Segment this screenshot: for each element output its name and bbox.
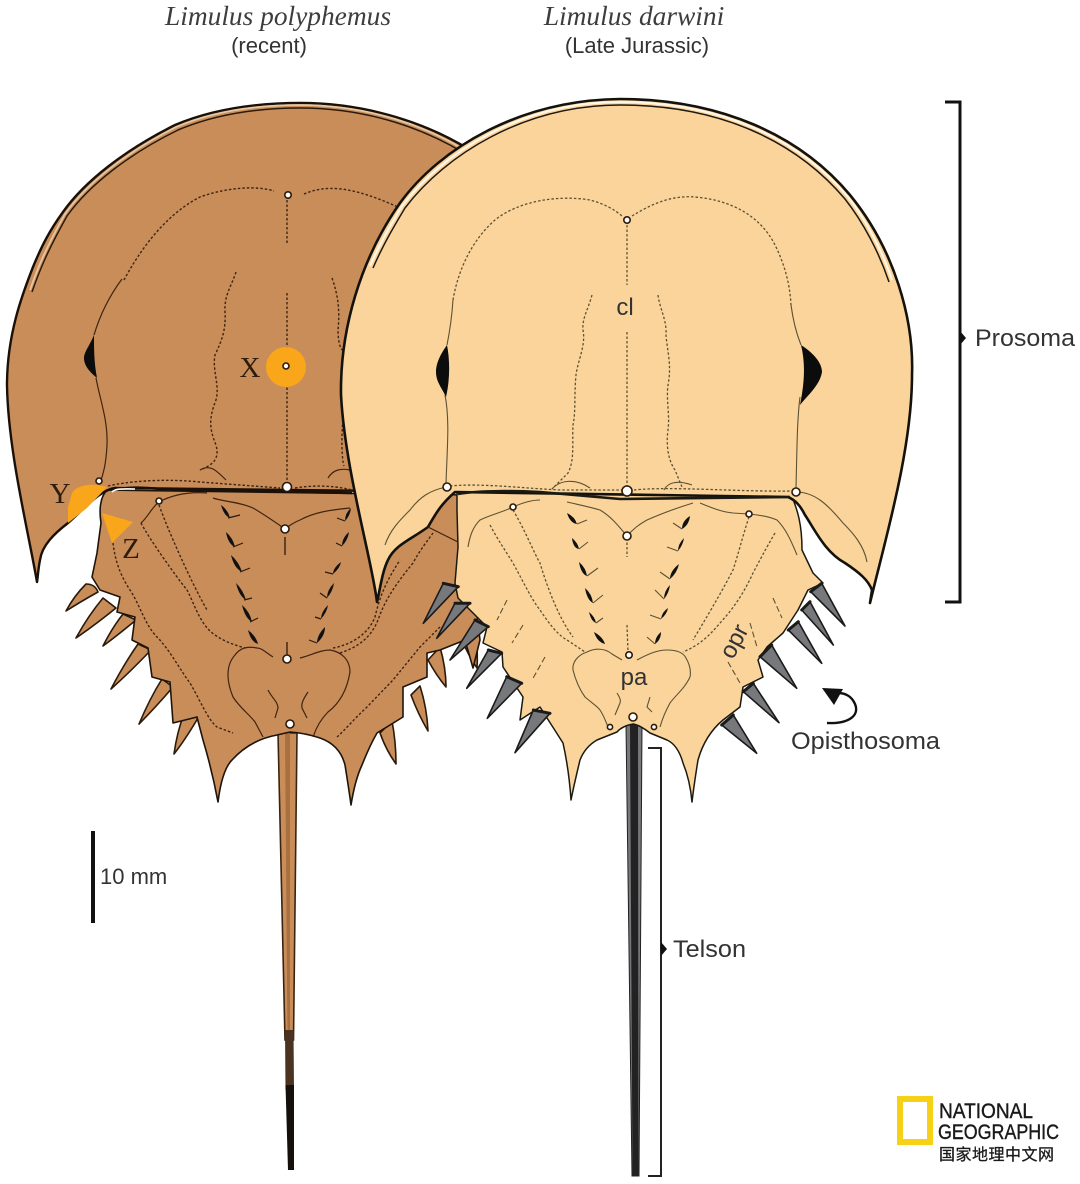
spine bases: dark caps: [443, 583, 822, 725]
hinge: light: [450, 485, 792, 499]
apodemes: light: [567, 513, 690, 644]
holes: brown specimen: [96, 192, 294, 728]
marginal spot: Y: [68, 485, 107, 523]
telson: brown: [278, 733, 297, 1170]
scale bar: 10 mm: [91, 831, 167, 923]
opisthosoma: brown: [92, 490, 480, 805]
title: Limulus polyphemus: Limulus polyphemus: [164, 1, 391, 31]
logo: National Geographic: GEOGRAPHIC: [938, 1121, 1059, 1144]
title: Limulus darwini: Limulus darwini: [543, 1, 724, 31]
cardiac spot: X: [266, 347, 306, 387]
opisthosoma lines: brown: [113, 493, 440, 737]
label: Z: Z: [122, 533, 140, 565]
bracket: Prosoma: [945, 102, 1076, 602]
title: Limulus darwini: (Late Jurassic): [565, 33, 709, 58]
logo: National Geographic: NATIONAL: [939, 1100, 1033, 1123]
prosoma: light: [341, 99, 912, 603]
glabella lines: brown prosoma: [94, 188, 400, 484]
spines: grey: [423, 583, 845, 753]
arrow and label: Opisthosoma: Opisthosoma: [791, 728, 941, 755]
logo: National Geographic: [900, 1099, 1059, 1164]
illustration: Limulus polyphemus specimen: [7, 103, 480, 1170]
title: Limulus polyphemus: (recent): [231, 33, 307, 58]
marginal spot: Z: [102, 513, 133, 543]
eye: light left: [436, 345, 449, 397]
label: X: X: [240, 352, 261, 384]
label: cl: cl: [616, 294, 634, 321]
rim: light prosoma double line: [370, 102, 892, 282]
bracket: Telson: Telson: [673, 936, 746, 963]
rim: brown prosoma double line: [30, 105, 466, 292]
opisthosoma: light: [455, 492, 823, 802]
eye: brown left: [84, 335, 97, 378]
label: Y: Y: [50, 478, 71, 510]
eye: light right: [800, 345, 822, 405]
label: pa: pa: [621, 664, 648, 691]
wedge line: between prosoma and opisthosoma: [428, 527, 458, 542]
scale bar: 10 mm: 10 mm: [100, 864, 167, 889]
opisthosoma lines: light: [468, 500, 797, 727]
hinge: brown: [108, 480, 352, 493]
arrow and label: Opisthosoma: [791, 688, 941, 755]
glabella lines: light prosoma: [385, 197, 867, 562]
holes: light specimen: [443, 217, 800, 730]
bracket: Telson: [648, 748, 746, 1176]
label: opr: opr: [714, 620, 754, 663]
prosoma: brown: [7, 103, 470, 582]
illustration: Limulus darwini specimen: [341, 99, 912, 1176]
spines: brown opisthosoma: [66, 584, 477, 764]
bracket: Prosoma: Prosoma: [975, 325, 1076, 352]
apodemes: brown: [221, 505, 351, 644]
telson: grey: [626, 725, 642, 1176]
title: Limulus darwini: [543, 1, 724, 58]
logo: National Geographic: 国家地理中文网: [939, 1146, 1054, 1164]
title: Limulus polyphemus: [164, 1, 391, 58]
